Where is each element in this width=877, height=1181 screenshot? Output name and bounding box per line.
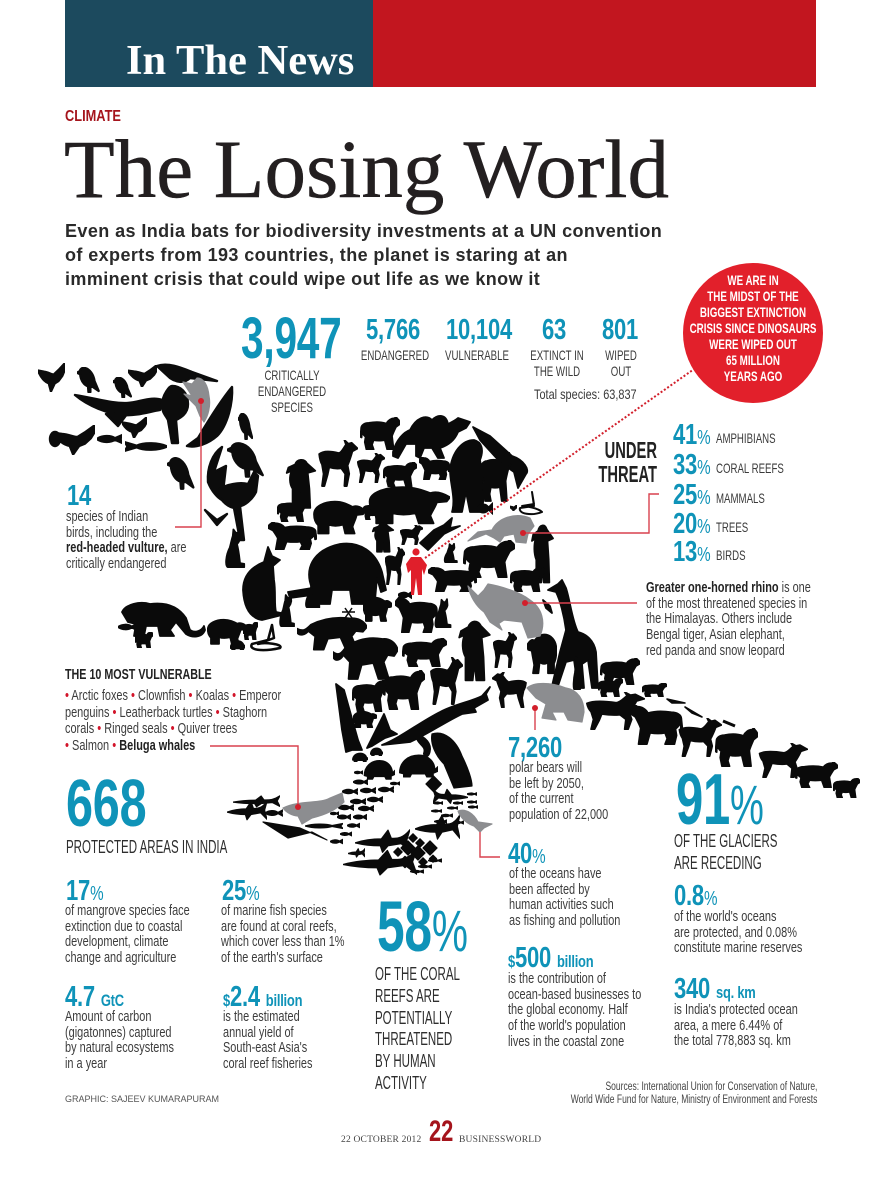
glaciers label: ARE RECEDING bbox=[674, 853, 762, 873]
red circle callout text: THE MIDST OF THE bbox=[707, 288, 799, 304]
stat: 4.7 GtC: 4.7 GtC bbox=[65, 981, 124, 1013]
India ocean text: area, a mere 6.44% of bbox=[674, 1018, 782, 1034]
under threat percentages: BIRDS bbox=[716, 547, 746, 563]
carbon text: by natural ecosystems bbox=[65, 1040, 174, 1056]
callout lines and dots bbox=[175, 401, 659, 857]
graphic credit: GRAPHIC: SAJEEV KUMARAPURAM bbox=[65, 1094, 219, 1104]
ocean business text: lives in the coastal zone bbox=[508, 1034, 624, 1050]
10 most vulnerable list: • Salmon • Beluga whales bbox=[65, 737, 195, 754]
marine fish text: of marine fish species bbox=[221, 903, 327, 919]
polar bear bbox=[527, 684, 584, 722]
birds text: birds, including the bbox=[66, 525, 157, 541]
rhino text block: Bengal tiger, Asian elephant, bbox=[646, 627, 785, 643]
ocean business text: the global economy. Half bbox=[508, 1002, 628, 1018]
rhino text block: Greater one-horned rhino is one bbox=[646, 580, 811, 596]
stat: wiped out: 801 bbox=[602, 314, 638, 346]
stat: 17%: 17% bbox=[66, 875, 103, 907]
stat: $500 billion: $500 billion bbox=[508, 942, 593, 974]
intro text: of experts from 193 countries, the planet is staring at an bbox=[65, 245, 568, 265]
under threat percentages: 13% bbox=[673, 536, 710, 568]
red circle callout text bbox=[690, 272, 816, 384]
label: critically endangered: CRITICALLY bbox=[264, 367, 320, 383]
intro text bbox=[65, 221, 662, 289]
birds text: red-headed vulture, are bbox=[66, 540, 186, 556]
mangrove text: change and agriculture bbox=[65, 950, 176, 966]
protected oceans text: of the world's oceans bbox=[674, 909, 777, 925]
total species: Total species: 63,837 bbox=[534, 386, 637, 402]
fisheries text: South-east Asia's bbox=[223, 1040, 307, 1056]
coral reefs label: THREATENED bbox=[375, 1029, 452, 1049]
sources bbox=[570, 1081, 818, 1106]
under threat percentages: CORAL REEFS bbox=[716, 460, 784, 476]
stat: 340 sq. km: 340 sq. km bbox=[674, 973, 756, 1005]
red circle callout text: WERE WIPED OUT bbox=[709, 336, 797, 352]
ocean business text bbox=[508, 971, 641, 1050]
red panda bbox=[468, 516, 534, 543]
India ocean text: the total 778,883 sq. km bbox=[674, 1033, 791, 1049]
label: wiped out: OUT bbox=[611, 363, 631, 379]
stat: 91%: 91% bbox=[676, 760, 764, 840]
footer publication: BUSINESSWORLD bbox=[459, 1135, 541, 1145]
polar bears text: be left by 2050, bbox=[509, 776, 584, 792]
number 3,947: 3,947 bbox=[241, 306, 342, 371]
label: critically endangered bbox=[258, 367, 326, 415]
under threat percentages bbox=[673, 419, 784, 568]
marine fish text: of the earth's surface bbox=[221, 950, 323, 966]
red circle callout text: YEARS AGO bbox=[724, 368, 782, 384]
coral reefs label: REEFS ARE bbox=[375, 986, 440, 1006]
section heading: In The News: In The News bbox=[126, 37, 354, 84]
under threat percentages: 41% bbox=[673, 419, 710, 451]
vulture bbox=[183, 378, 210, 422]
stat: extinct in the wild: 63 bbox=[542, 314, 566, 346]
marine fish text: are found at coral reefs, bbox=[221, 919, 337, 935]
group: tail animal silhouettes bbox=[574, 656, 860, 798]
carbon text bbox=[65, 1009, 174, 1072]
birds text: critically endangered bbox=[66, 556, 166, 572]
rhino text block bbox=[646, 580, 811, 659]
under threat heading: THREAT bbox=[598, 461, 657, 487]
label: protected areas: PROTECTED AREAS IN INDIA bbox=[66, 837, 227, 857]
birds text: species of Indian bbox=[66, 509, 148, 525]
coral reefs label bbox=[375, 964, 460, 1093]
under threat percentages: MAMMALS bbox=[716, 490, 765, 506]
sources: Sources: International Union for Conservation of Nature, bbox=[605, 1081, 817, 1093]
sources: World Wide Fund for Nature, Ministry of Environment and Forests bbox=[570, 1094, 817, 1106]
intro text: imminent crisis that could wipe out life as we know it bbox=[65, 269, 540, 289]
10 most vulnerable list: penguins • Leatherback turtles • Staghorn bbox=[65, 704, 267, 721]
stat: 40%: 40% bbox=[508, 838, 545, 870]
fisheries text bbox=[223, 1009, 312, 1072]
oceans text: as fishing and pollution bbox=[509, 913, 620, 929]
glaciers label bbox=[674, 831, 777, 873]
oceans text: human activities such bbox=[509, 897, 614, 913]
polar bears text: polar bears will bbox=[509, 760, 582, 776]
birds text bbox=[66, 509, 186, 572]
page number: 22 bbox=[429, 1115, 453, 1148]
carbon text: in a year bbox=[65, 1056, 107, 1072]
stat: 58%: 58% bbox=[377, 888, 468, 967]
title: The Losing World bbox=[64, 123, 669, 215]
stat: 7,260 polar bears: 7,260 bbox=[508, 732, 562, 764]
red circle callout text: WE ARE IN bbox=[727, 272, 779, 288]
stat: endangered: 5,766 bbox=[366, 314, 420, 346]
stat: 668 protected areas: 668 bbox=[66, 766, 146, 841]
under threat heading bbox=[598, 437, 657, 487]
carbon text: (gigatonnes) captured bbox=[65, 1025, 172, 1041]
red circle callout text: 65 MILLION bbox=[726, 352, 780, 368]
label: critically endangered: SPECIES bbox=[271, 399, 313, 415]
sea cow bbox=[458, 810, 492, 832]
fisheries text: annual yield of bbox=[223, 1025, 294, 1041]
under threat percentages: 25% bbox=[673, 479, 710, 511]
under threat percentages: AMPHIBIANS bbox=[716, 430, 776, 446]
India ocean text bbox=[674, 1002, 798, 1049]
10 most vulnerable heading: THE 10 MOST VULNERABLE bbox=[65, 667, 212, 683]
under threat percentages: 33% bbox=[673, 449, 710, 481]
under threat heading: UNDER bbox=[605, 437, 657, 463]
ocean business text: of the world's population bbox=[508, 1018, 626, 1034]
dotted pointer from human to circle bbox=[425, 367, 697, 558]
intro text: Even as India bats for biodiversity investments at a UN convention bbox=[65, 221, 662, 241]
rhino bbox=[468, 584, 543, 638]
rhino text block: of the most threatened species in bbox=[646, 596, 807, 612]
polar bears text bbox=[509, 760, 608, 823]
stat: 14 birds: 14 bbox=[67, 480, 91, 512]
under threat percentages: 20% bbox=[673, 508, 710, 540]
header band bbox=[65, 0, 816, 87]
under threat percentages: TREES bbox=[716, 519, 748, 535]
mangrove text bbox=[65, 903, 190, 966]
human figure in red bbox=[406, 548, 427, 595]
10 most vulnerable list bbox=[65, 687, 281, 754]
red circle callout text: CRISIS SINCE DINOSAURS bbox=[690, 320, 816, 336]
marine fish text: which cover less than 1% bbox=[221, 934, 345, 950]
label: wiped out bbox=[605, 347, 637, 379]
polar bears text: of the current bbox=[509, 791, 574, 807]
oceans text: been affected by bbox=[509, 882, 590, 898]
footer date: 22 OCTOBER 2012 bbox=[341, 1135, 421, 1145]
stat: 25%: 25% bbox=[222, 875, 259, 907]
stat: vulnerable: 10,104 bbox=[446, 314, 512, 346]
glaciers label: OF THE GLACIERS bbox=[674, 831, 777, 851]
label: critically endangered: ENDANGERED bbox=[258, 383, 326, 399]
carbon text: Amount of carbon bbox=[65, 1009, 151, 1025]
category label: CLIMATE bbox=[65, 108, 121, 125]
10 most vulnerable list: corals • Ringed seals • Quiver trees bbox=[65, 720, 237, 737]
group: sea creature silhouettes (lower body) bbox=[227, 733, 478, 875]
label: endangered: ENDANGERED bbox=[361, 347, 429, 363]
oceans text bbox=[509, 866, 620, 929]
fisheries text: coral reef fisheries bbox=[223, 1056, 312, 1072]
grey highlighted species bbox=[183, 378, 584, 832]
elephant bbox=[288, 544, 386, 604]
mangrove text: extinction due to coastal bbox=[65, 919, 182, 935]
label: extinct in the wild: THE WILD bbox=[534, 363, 580, 379]
mangrove text: of mangrove species face bbox=[65, 903, 190, 919]
callout anchor dots bbox=[198, 398, 538, 810]
group: bird silhouettes (head of the dinosaur) bbox=[38, 363, 263, 540]
coral reefs label: ACTIVITY bbox=[375, 1073, 427, 1093]
ocean business text: ocean-based businesses to bbox=[508, 987, 641, 1003]
polar bears text: population of 22,000 bbox=[509, 807, 608, 823]
label: extinct in the wild bbox=[530, 347, 584, 379]
coral reefs label: BY HUMAN bbox=[375, 1051, 436, 1071]
coral reefs label: OF THE CORAL bbox=[375, 964, 460, 984]
rhino text block: red panda and snow leopard bbox=[646, 643, 785, 659]
protected oceans text: are protected, and 0.08% bbox=[674, 925, 797, 941]
coral reefs label: POTENTIALLY bbox=[375, 1008, 452, 1028]
rhino text block: the Himalayas. Others include bbox=[646, 611, 792, 627]
India ocean text: is India's protected ocean bbox=[674, 1002, 798, 1018]
oceans text: of the oceans have bbox=[509, 866, 602, 882]
mangrove text: development, climate bbox=[65, 934, 168, 950]
10 most vulnerable list: • Arctic foxes • Clownfish • Koalas • Emperor bbox=[65, 687, 281, 704]
ocean business text: is the contribution of bbox=[508, 971, 606, 987]
label: wiped out: WIPED bbox=[605, 347, 637, 363]
giraffe bbox=[548, 580, 598, 688]
protected oceans text bbox=[674, 909, 802, 956]
label: extinct in the wild: EXTINCT IN bbox=[530, 347, 584, 363]
stat: 0.8%: 0.8% bbox=[674, 880, 717, 912]
group: mammal silhouettes (body of the dinosaur) bbox=[118, 416, 598, 752]
beluga whale bbox=[283, 793, 344, 824]
stat: $2.4 billion: $2.4 billion bbox=[223, 981, 302, 1013]
fisheries text: is the estimated bbox=[223, 1009, 300, 1025]
protected oceans text: constitute marine reserves bbox=[674, 940, 802, 956]
red callout circle bbox=[683, 263, 823, 403]
marine fish text bbox=[221, 903, 345, 966]
label: vulnerable: VULNERABLE bbox=[445, 347, 509, 363]
red circle callout text: BIGGEST EXTINCTION bbox=[700, 304, 806, 320]
